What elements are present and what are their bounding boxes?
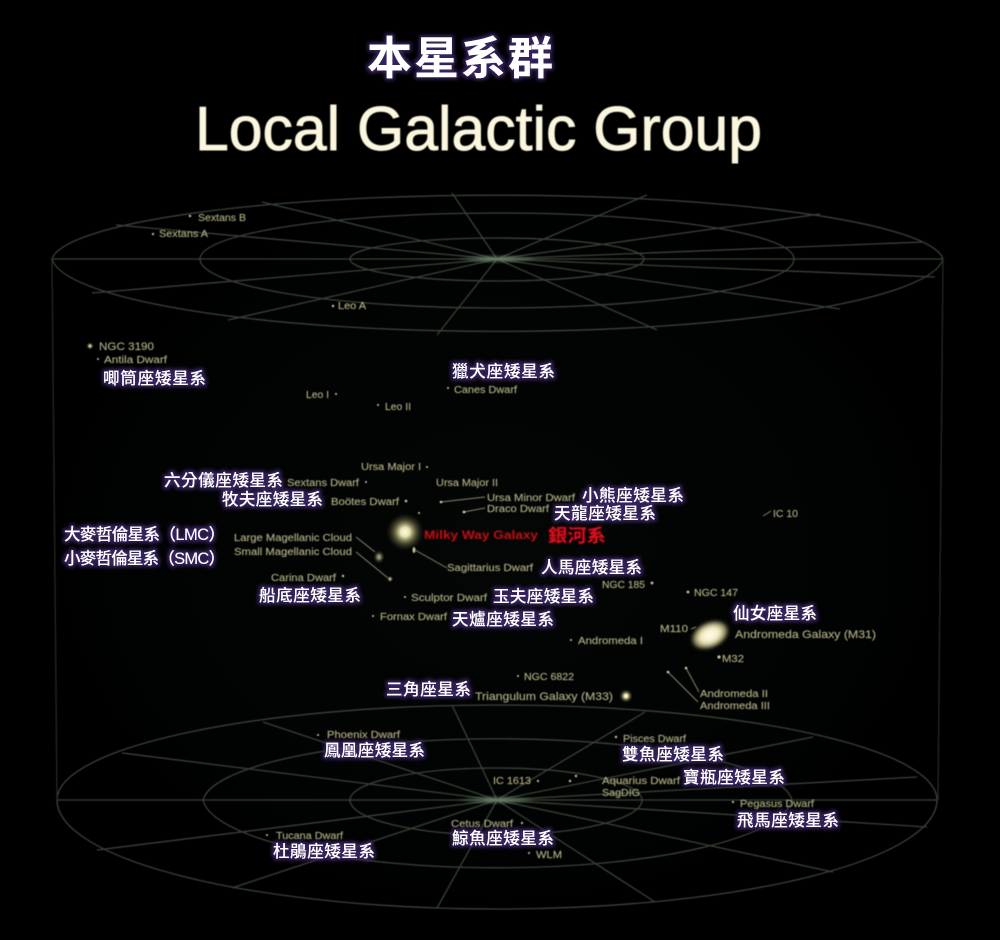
English galaxy labels: Phoenix Dwarf xyxy=(327,730,400,741)
Chinese galaxy labels: 雙魚座矮星系 xyxy=(622,744,724,764)
Chinese galaxy labels: 大麥哲倫星系（LMC） xyxy=(64,525,225,544)
English galaxy labels: Andromeda Galaxy (M31) xyxy=(735,629,876,641)
English galaxy labels: IC 1613 xyxy=(493,776,531,787)
English galaxy labels: NGC 3190 xyxy=(99,341,154,353)
title: Chinese: 本星系群 xyxy=(367,33,553,84)
English galaxy labels: Boötes Dwarf xyxy=(331,497,399,508)
label: Milky Way Galaxy: Milky Way Galaxy xyxy=(424,530,539,542)
English galaxy labels: Ursa Major I xyxy=(361,462,421,473)
Chinese galaxy labels: 小熊座矮星系 xyxy=(582,486,684,505)
English galaxy labels: Leo A xyxy=(338,301,366,312)
English galaxy labels: Andromeda II xyxy=(700,689,768,700)
label: 銀河系: 銀河系 xyxy=(548,525,606,546)
Chinese galaxy labels: 飛馬座矮星系 xyxy=(737,811,839,830)
English galaxy labels: Draco Dwarf xyxy=(487,504,549,515)
bottom disc grid xyxy=(57,705,937,909)
English galaxy labels: Fornax Dwarf xyxy=(380,612,447,623)
Chinese galaxy labels: 玉夫座矮星系 xyxy=(493,587,594,606)
English galaxy labels: Leo II xyxy=(385,402,411,413)
galaxy: Milky Way xyxy=(386,513,424,551)
English galaxy labels: Andromeda I xyxy=(578,636,643,647)
Chinese galaxy labels: 鯨魚座矮星系 xyxy=(452,828,554,848)
Chinese galaxy labels: 小麥哲倫星系（SMC） xyxy=(64,549,225,568)
English galaxy labels: NGC 6822 xyxy=(524,672,574,683)
English galaxy labels: Andromeda III xyxy=(700,701,770,712)
galaxy: NGC 3190 xyxy=(86,342,94,350)
cylinder side edges xyxy=(52,259,943,800)
Chinese galaxy labels: 天爐座矮星系 xyxy=(452,610,554,629)
Chinese galaxy labels: 杜鵑座矮星系 xyxy=(273,842,375,861)
English galaxy labels: M110 xyxy=(660,624,688,635)
English galaxy labels: Pegasus Dwarf xyxy=(740,799,814,810)
English galaxy labels: Ursa Minor Dwarf xyxy=(487,493,575,504)
English galaxy labels: Large Magellanic Cloud xyxy=(234,533,352,544)
English galaxy labels: Pisces Dwarf xyxy=(623,734,686,745)
Chinese galaxy labels: 鳳凰座矮星系 xyxy=(324,741,425,760)
English galaxy labels: Sagittarius Dwarf xyxy=(447,563,533,574)
Chinese galaxy labels: 寶瓶座矮星系 xyxy=(683,767,785,787)
English galaxy labels: Antila Dwarf xyxy=(104,355,167,366)
title: English: Local Galactic Group xyxy=(195,95,762,164)
Chinese galaxy labels: 船底座矮星系 xyxy=(259,586,361,605)
Chinese galaxy labels: 仙女座星系 xyxy=(733,604,817,623)
English galaxy labels: SagDIG xyxy=(602,788,640,799)
Chinese galaxy labels: 唧筒座矮星系 xyxy=(103,368,206,388)
galaxy: Large Magellanic Cloud xyxy=(373,550,385,564)
Chinese galaxy labels: 三角座星系 xyxy=(386,680,471,699)
English galaxy labels: IC 10 xyxy=(773,509,798,520)
galaxy: Andromeda M31 xyxy=(685,613,735,657)
Milky Way labels in red xyxy=(424,525,606,546)
galaxy: Small Magellanic Cloud xyxy=(386,576,394,582)
English galaxy labels: Sextans B xyxy=(198,213,246,224)
English galaxy labels: Triangulum Galaxy (M33) xyxy=(475,691,613,703)
English galaxy labels: Ursa Major II xyxy=(436,478,498,489)
Chinese galaxy labels: 牧夫座矮星系 xyxy=(222,490,323,509)
English galaxy labels: Tucana Dwarf xyxy=(276,831,343,842)
Chinese galaxy labels xyxy=(64,362,839,861)
Chinese galaxy labels: 六分儀座矮星系 xyxy=(164,471,283,490)
satellite star markers xyxy=(97,215,734,854)
Chinese galaxy labels: 獵犬座矮星系 xyxy=(452,362,555,381)
English galaxy labels: NGC 185 xyxy=(602,580,645,591)
English galaxy labels: Small Magellanic Cloud xyxy=(234,547,352,558)
English galaxy labels: Sculptor Dwarf xyxy=(411,593,487,604)
English galaxy labels: Carina Dwarf xyxy=(271,573,336,584)
English galaxy labels xyxy=(99,213,876,861)
English galaxy labels: Cetus Dwarf xyxy=(451,819,513,830)
Chinese galaxy labels: 天龍座矮星系 xyxy=(554,504,656,523)
English galaxy labels: Sextans Dwarf xyxy=(287,478,359,489)
Chinese galaxy labels: 人馬座矮星系 xyxy=(541,558,642,577)
English galaxy labels: WLM xyxy=(536,850,562,861)
English galaxy labels: Aquarius Dwarf xyxy=(602,776,680,787)
English galaxy labels: Leo I xyxy=(306,390,329,401)
English galaxy labels: Sextans A xyxy=(159,229,208,240)
cylinder wireframe xyxy=(52,193,943,909)
English galaxy labels: NGC 147 xyxy=(694,588,738,599)
leader lines xyxy=(356,497,771,702)
English galaxy labels: M32 xyxy=(722,654,744,665)
English galaxy labels: Canes Dwarf xyxy=(454,385,517,396)
top disc grid xyxy=(52,193,943,335)
galaxy: Triangulum M33 xyxy=(619,689,633,703)
heading xyxy=(195,33,762,164)
galaxies xyxy=(86,342,735,703)
